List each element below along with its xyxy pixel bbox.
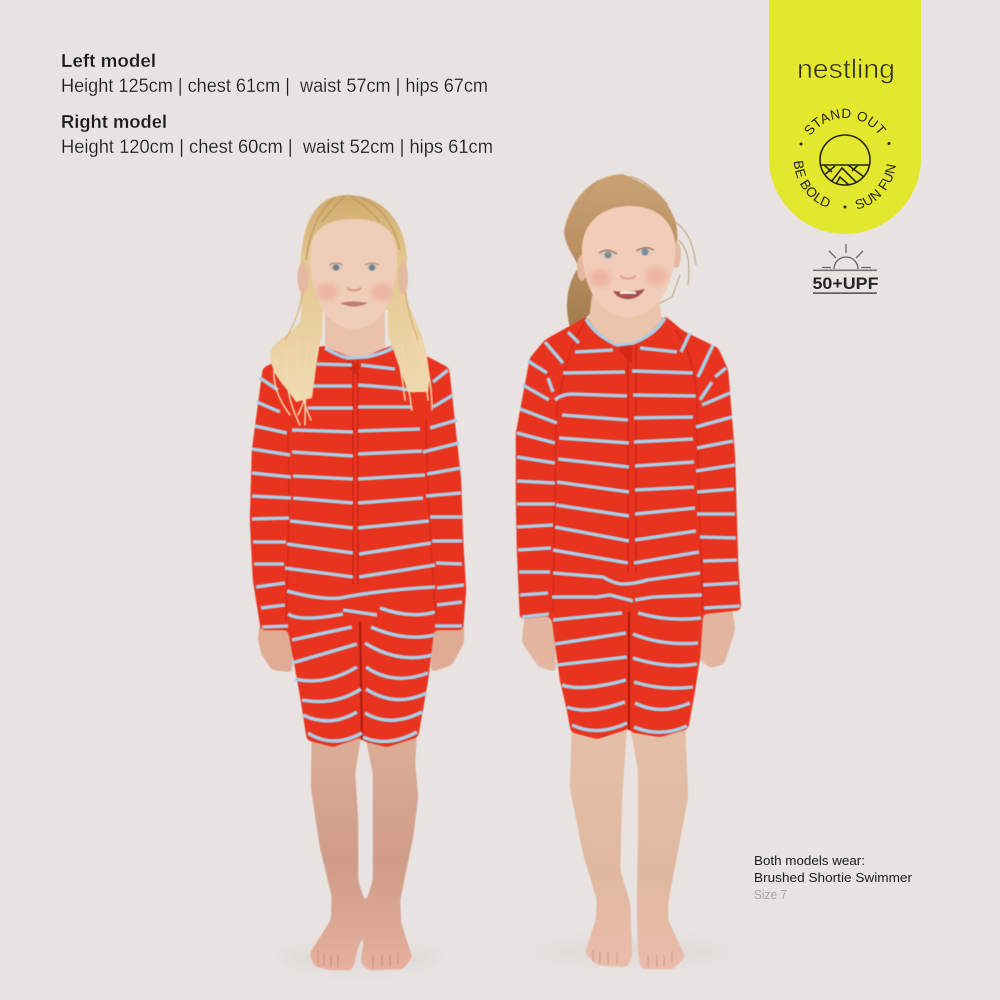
heading: right model measurements: Height 120cm | chest 60cm | waist 52cm | hips 61cm <box>61 137 493 158</box>
figure: left model <box>250 195 466 970</box>
right model face <box>577 206 681 317</box>
circular slogan: STAND OUT <box>804 108 886 134</box>
caption: garment worn: Brushed Shortie Swimmer <box>754 870 913 885</box>
caption: garment worn <box>754 853 913 902</box>
left model hands <box>258 622 464 672</box>
heading: left model measurements <box>61 50 488 97</box>
left model hair <box>270 195 432 425</box>
right model hands <box>522 608 735 672</box>
right model hair back and ponytail <box>564 174 696 330</box>
circular slogan <box>794 108 896 209</box>
icon: sun over fields <box>820 135 870 186</box>
icon: 50+ UPF sun <box>812 244 878 294</box>
icon: 50+ UPF sun: 50+UPF <box>812 274 878 293</box>
figure: right model <box>516 174 741 969</box>
left model swimsuit <box>250 345 466 747</box>
right model stripes <box>517 318 740 732</box>
circular slogan: BE BOLD <box>794 161 830 206</box>
brand name: nestling <box>797 54 895 84</box>
right model neck <box>589 295 662 344</box>
heading: left model measurements: Left model <box>61 50 156 71</box>
yellow tag shape <box>769 0 921 234</box>
left model neck <box>325 310 385 356</box>
heading: left model measurements: Height 125cm | chest 61cm | waist 57cm | hips 67cm <box>61 76 488 97</box>
left model legs and feet <box>310 730 418 970</box>
left model stripes <box>252 347 464 741</box>
left model face <box>298 219 408 329</box>
caption: garment worn: Both models wear: <box>754 853 865 868</box>
heading: right model measurements: Right model <box>61 111 167 132</box>
right model swimsuit <box>516 316 741 739</box>
caption: garment worn: Size 7 <box>754 887 787 902</box>
heading: right model measurements <box>61 111 493 158</box>
floor shadows <box>275 940 735 970</box>
brand tag <box>769 0 921 234</box>
circular slogan: SUN FUN <box>856 164 896 209</box>
right model legs and feet <box>570 725 688 969</box>
